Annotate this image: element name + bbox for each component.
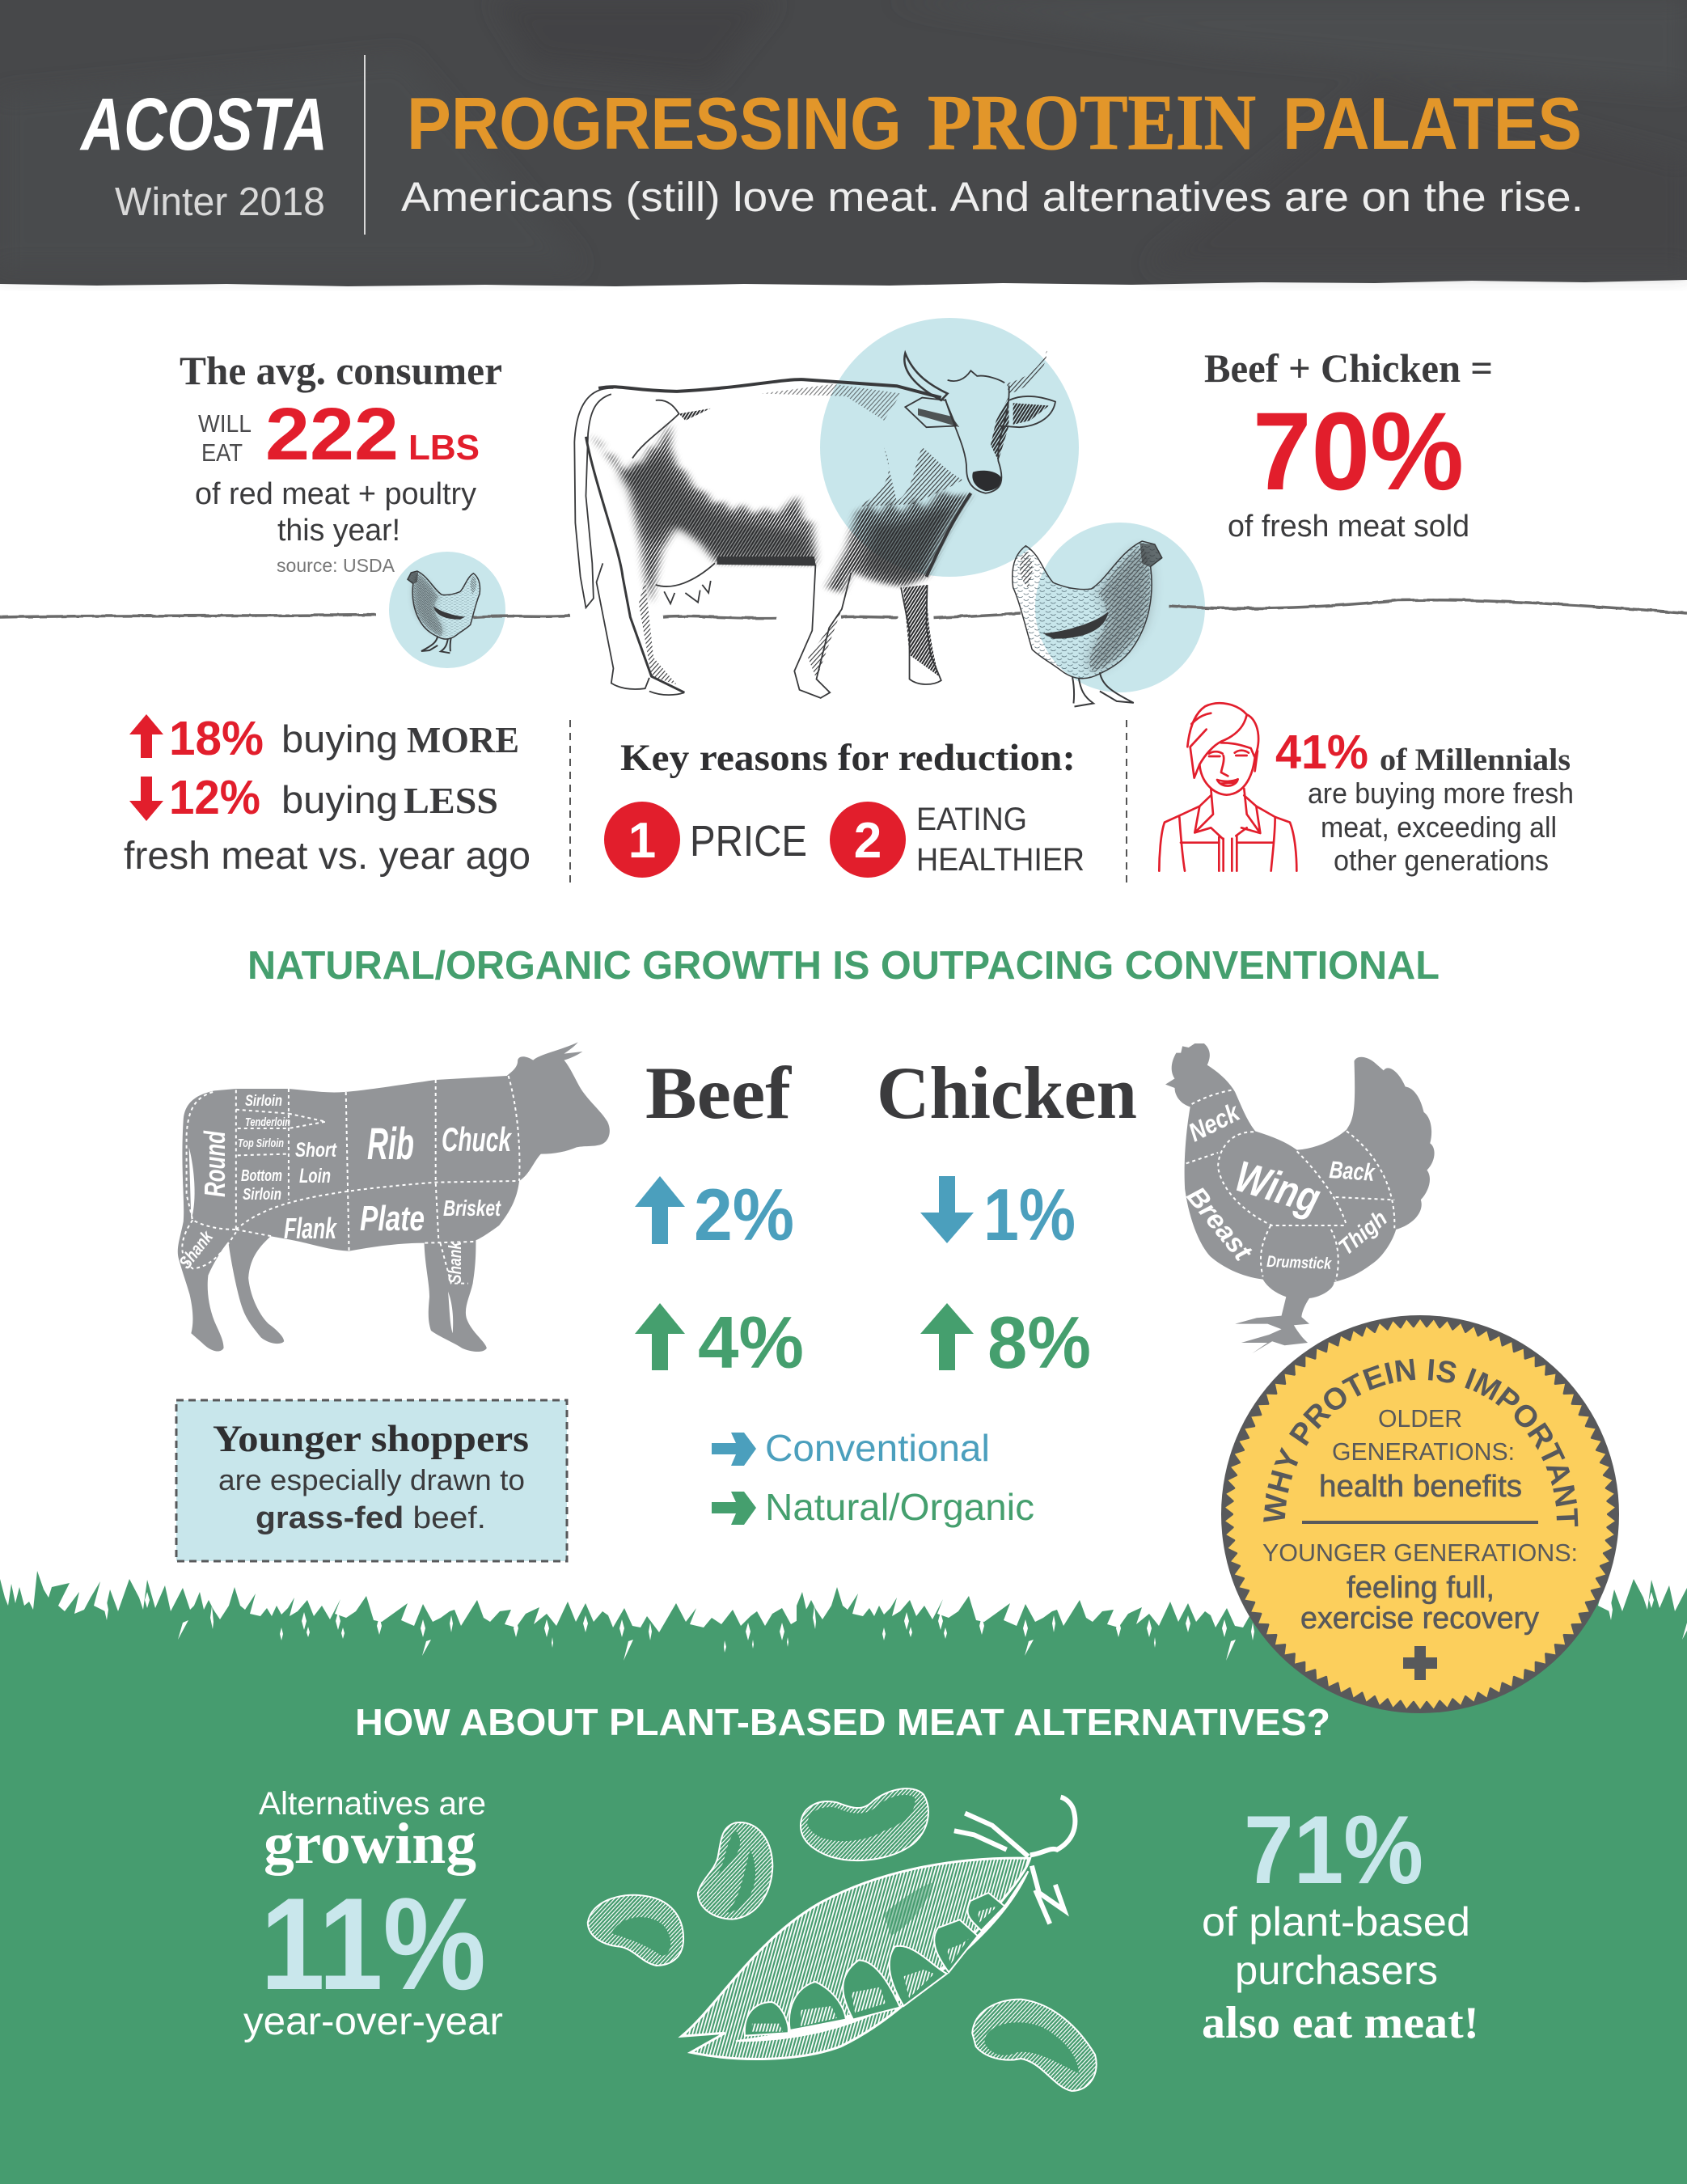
badge text: older generations: OLDER [1378, 1404, 1462, 1433]
description: this year! [277, 514, 400, 548]
badge divider [1302, 1521, 1538, 1524]
heading: natural/organic: NATURAL/ORGANIC GROWTH IS OUTPACING CONVENTIONAL [247, 944, 1440, 988]
badge: 1 [604, 802, 680, 878]
callout: younger shoppers: grass-fed beef. [256, 1501, 486, 1535]
illustration: engraved hen [1013, 541, 1162, 707]
legend: natural/organic: Natural/Organic [765, 1486, 1034, 1528]
section: green grass background [0, 1571, 1687, 2184]
cut labels: Breast [1181, 1181, 1258, 1268]
icon: plus [1403, 1646, 1437, 1680]
stat: chicken conventional 1%: 1% [983, 1175, 1076, 1256]
description: meat, exceeding all [1321, 811, 1557, 844]
bean: left [588, 1895, 683, 1966]
panel: alternatives growth [243, 1786, 503, 2043]
illustration: beef cuts diagram [175, 1042, 610, 1352]
cut labels: Top Sirloin [238, 1136, 284, 1150]
text: year-over-year: year-over-year [243, 2000, 503, 2043]
cut labels: Rib [367, 1118, 414, 1169]
cut labels: Thigh [1334, 1205, 1392, 1260]
cut labels: Sirloin [243, 1186, 281, 1204]
text: buying more: MORE [407, 719, 519, 760]
number: 71%: 71% [1244, 1796, 1423, 1904]
illustration: engraved cow [573, 349, 1056, 699]
text: plant-based purchasers [1202, 1899, 1470, 1993]
heading: chicken: Chicken [877, 1052, 1137, 1134]
cut labels [1181, 1097, 1392, 1273]
cut labels: Plate [360, 1199, 425, 1238]
description: of fresh meat sold [1228, 510, 1469, 544]
text: also eat meat: also eat meat! [1202, 1998, 1479, 2048]
badge: why protein is important [1221, 1315, 1619, 1713]
cut labels: Bottom [241, 1167, 282, 1185]
illustration: small hen circle [389, 552, 505, 668]
panel: beef + chicken stat [1204, 345, 1493, 544]
label: will eat [198, 409, 252, 467]
cut labels: Shank [175, 1226, 218, 1272]
stat: 18%: 18% [169, 712, 264, 765]
cut labels: Drumstick [1266, 1253, 1332, 1273]
label: price: PRICE [690, 817, 807, 866]
header divider [364, 55, 366, 235]
text: buying less: buying [281, 778, 398, 821]
cow shading [589, 351, 1048, 684]
cut labels: Neck [1184, 1097, 1245, 1147]
description [195, 477, 476, 548]
cut labels: Back [1329, 1157, 1376, 1187]
bean: lower right [972, 2000, 1097, 2091]
number: 222 lbs: 222 [265, 393, 399, 476]
panel: key reasons [604, 737, 1084, 878]
callout: younger shoppers [176, 1400, 567, 1561]
cut labels [175, 1093, 513, 1284]
heading: key reasons: Key reasons for reduction: [620, 737, 1076, 779]
source: source: USDA [277, 555, 395, 576]
badge curved title: WHY PROTEIN IS IMPORTANT [1263, 1359, 1579, 1527]
horizon line [0, 600, 1687, 618]
number: 222 lbs: LBS [408, 428, 480, 468]
icon: green arrow [712, 1492, 756, 1525]
callout: younger shoppers: Younger shoppers [213, 1418, 529, 1460]
bean: top [801, 1788, 928, 1860]
badge text: older generations [1319, 1404, 1522, 1504]
illustration: chicken cuts diagram [1165, 1043, 1435, 1353]
illustration: blue circle behind cow [820, 318, 1079, 577]
badge text: younger generations [1262, 1539, 1578, 1636]
badge text: older generations: health benefits [1319, 1470, 1522, 1504]
number: 222 lbs [265, 393, 480, 476]
label: will eat: WILL [198, 409, 252, 438]
badge text: younger generations: exercise recovery [1300, 1602, 1539, 1636]
label: eating healthier: HEALTHIER [916, 842, 1084, 878]
label: eating healthier: EATING [916, 802, 1027, 837]
text: buying less [281, 778, 498, 821]
description: are buying more fresh [1308, 777, 1574, 810]
text: alternatives are: Alternatives are [259, 1786, 486, 1822]
title [407, 79, 1582, 167]
title: PALATES [1283, 83, 1582, 165]
cut labels: Round [198, 1130, 231, 1197]
title: PROGRESSING [407, 83, 902, 165]
icon: red up arrow [129, 714, 163, 758]
text: buying more: buying [281, 717, 398, 760]
icon: green up arrow [635, 1303, 685, 1370]
stat: 41%: 41% [1275, 726, 1368, 779]
text: plant-based purchasers: of plant-based [1202, 1899, 1470, 1945]
cut labels: Shank [445, 1241, 465, 1284]
column: beef [635, 1052, 804, 1384]
title: PROTEIN [928, 79, 1256, 167]
logo: Acosta: ACOSTA [79, 83, 328, 166]
text: plant-based purchasers: purchasers [1235, 1948, 1438, 1993]
illustration: blue circle behind hen [1035, 523, 1205, 692]
description [1308, 777, 1574, 877]
icon: blue arrow [712, 1433, 756, 1466]
label: eating healthier [916, 802, 1084, 878]
number: 70%: 70% [1253, 390, 1464, 514]
stat: beef conventional 2%: 2% [694, 1175, 794, 1256]
subtitle: Americans (still) love meat. And alternatives are on the rise. [401, 174, 1583, 220]
pea pod [682, 1858, 1030, 2059]
text: buying more [281, 717, 519, 760]
icon: green up arrow [920, 1303, 974, 1370]
text: fresh meat vs year ago: fresh meat vs. year ago [124, 835, 531, 878]
text: buying less: LESS [404, 780, 498, 821]
panel: 71 percent [1202, 1796, 1479, 2048]
callout: younger shoppers: are especially drawn to [218, 1463, 525, 1496]
stat: beef natural 4%: 4% [698, 1302, 804, 1384]
cut labels: Wing [1229, 1152, 1326, 1223]
cut labels: Chuck [442, 1120, 513, 1158]
cow outline [598, 379, 941, 398]
heading: plant-based alternatives: HOW ABOUT PLANT-BASED MEAT ALTERNATIVES? [355, 1701, 1330, 1743]
icon: blue up arrow [635, 1176, 685, 1244]
badge: 2 [830, 802, 906, 878]
illustration: pea pod and beans [588, 1788, 1097, 2091]
heading: beef: Beef [645, 1052, 792, 1134]
badge text: younger generations: feeling full, [1347, 1571, 1495, 1605]
cut labels: Brisket [443, 1196, 501, 1221]
panel: millennials [1159, 703, 1574, 877]
cut labels: Loin [299, 1165, 331, 1187]
stat: 12%: 12% [169, 771, 260, 824]
pod stem [954, 1797, 1075, 1924]
bean: middle [698, 1822, 772, 1919]
header band [0, 0, 1687, 286]
icon: millennial person [1159, 703, 1296, 871]
badge: 2: 2 [854, 813, 882, 869]
illustration: small hen [408, 571, 480, 653]
label: will eat: EAT [201, 438, 243, 467]
text: growing: growing [264, 1811, 476, 1876]
issue date: Winter 2018 [115, 180, 325, 224]
badge: 1: 1 [628, 813, 656, 869]
chicken silhouette [1165, 1043, 1435, 1353]
heading: beef + chicken: Beef + Chicken = [1204, 345, 1493, 391]
number: 11%: 11% [260, 1871, 486, 2017]
legend [712, 1427, 1034, 1528]
icon: red down arrow [129, 777, 163, 821]
badge text: older generations: GENERATIONS: [1332, 1437, 1515, 1466]
heading: avg consumer: The avg. consumer [180, 348, 502, 393]
panel: buying more or less [124, 712, 531, 878]
description: of red meat + poultry [195, 477, 476, 511]
stat: chicken natural 8%: 8% [987, 1302, 1091, 1384]
label: of millennials: of Millennials [1380, 743, 1571, 777]
cut labels: Sirloin [245, 1093, 282, 1110]
cut labels: Tenderloin [245, 1115, 290, 1129]
panel: consumption stat [180, 348, 502, 576]
icon: blue down arrow [920, 1176, 974, 1243]
badge text: younger generations: YOUNGER GENERATIONS: [1262, 1539, 1578, 1567]
cow silhouette [178, 1042, 610, 1352]
column: chicken [877, 1052, 1137, 1384]
cut labels: Flank [284, 1212, 337, 1245]
cut labels: Short [295, 1139, 337, 1162]
legend: conventional: Conventional [765, 1427, 990, 1469]
description: other generations [1334, 844, 1549, 877]
